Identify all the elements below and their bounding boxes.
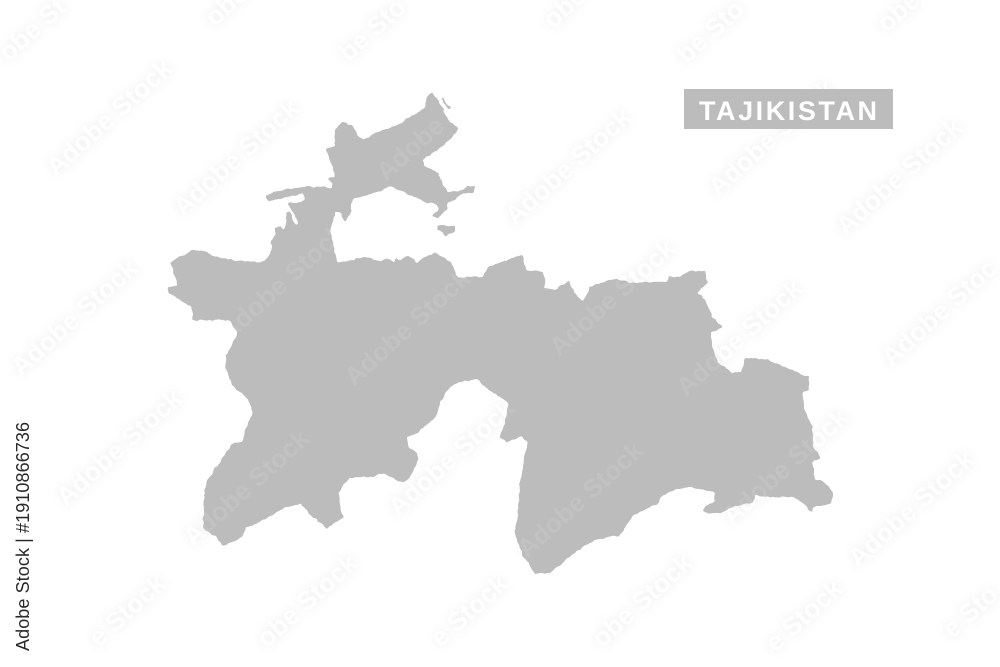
watermark pattern on background: Adobe Stock bbox=[842, 444, 980, 573]
watermark overlay on map: Adobe Stock bbox=[177, 423, 315, 552]
watermark overlay on map: Adobe Stock bbox=[370, 58, 508, 187]
small sliver northeast bbox=[440, 97, 451, 110]
watermark pattern on background: Adobe Stock bbox=[716, 402, 854, 531]
watermark overlay on map: Adobe Stock bbox=[338, 263, 476, 392]
watermark pattern on background: Adobe Stock bbox=[702, 73, 840, 202]
watermark overlay on map: Adobe Stock bbox=[382, 393, 520, 522]
watermark pattern on background: e Stock bbox=[760, 573, 849, 657]
country label: TAJIKISTAN: TAJIKISTAN bbox=[699, 96, 877, 126]
watermark overlay on map: Adobe Stock bbox=[213, 218, 351, 347]
map: Tajikistan silhouette bbox=[168, 93, 833, 573]
watermark overlay on map: Adobe Stock bbox=[511, 435, 649, 564]
watermark pattern on background: Adobe Stock bbox=[50, 383, 188, 512]
watermark pattern on background: obe Stock bbox=[586, 547, 699, 653]
watermark overlay on map bbox=[177, 58, 854, 564]
watermark pattern on background: obe Stock bbox=[251, 547, 364, 653]
small island east bbox=[437, 225, 455, 236]
watermark pattern on background: Adobe Stock bbox=[5, 253, 143, 382]
watermark pattern on background: Adobe Stock bbox=[499, 102, 637, 231]
watermark pattern on background: Adobe Stock bbox=[167, 93, 305, 222]
watermark pattern on background: Adobe Stock bbox=[543, 233, 681, 362]
watermark pattern on background: Adobe Stock bbox=[382, 393, 520, 522]
watermark pattern on background: e Stock bbox=[83, 568, 172, 652]
watermark pattern on background: e Stock bbox=[425, 568, 514, 652]
watermark overlay on map: Adobe Stock bbox=[543, 233, 681, 362]
main country shape bbox=[168, 93, 833, 573]
watermark pattern on background: Adobe Stock bbox=[40, 53, 178, 182]
watermark pattern on background: Adobe Stock bbox=[670, 273, 808, 402]
watermark pattern on background: Adobe Stoc bbox=[875, 253, 1000, 372]
watermark pattern on background: Adobe Stock bbox=[511, 435, 649, 564]
watermark overlay on map: Adobe Stock bbox=[670, 273, 808, 402]
country label: TAJIKISTAN bbox=[684, 89, 893, 129]
watermark overlay on map: Adobe Stock bbox=[716, 402, 854, 531]
stock credit, vertical text: Adobe Stock | #1910866736 bbox=[13, 422, 33, 651]
watermark pattern on background: Adobe Stock bbox=[177, 423, 315, 552]
watermark pattern on background: Adobe Stock bbox=[830, 112, 968, 241]
